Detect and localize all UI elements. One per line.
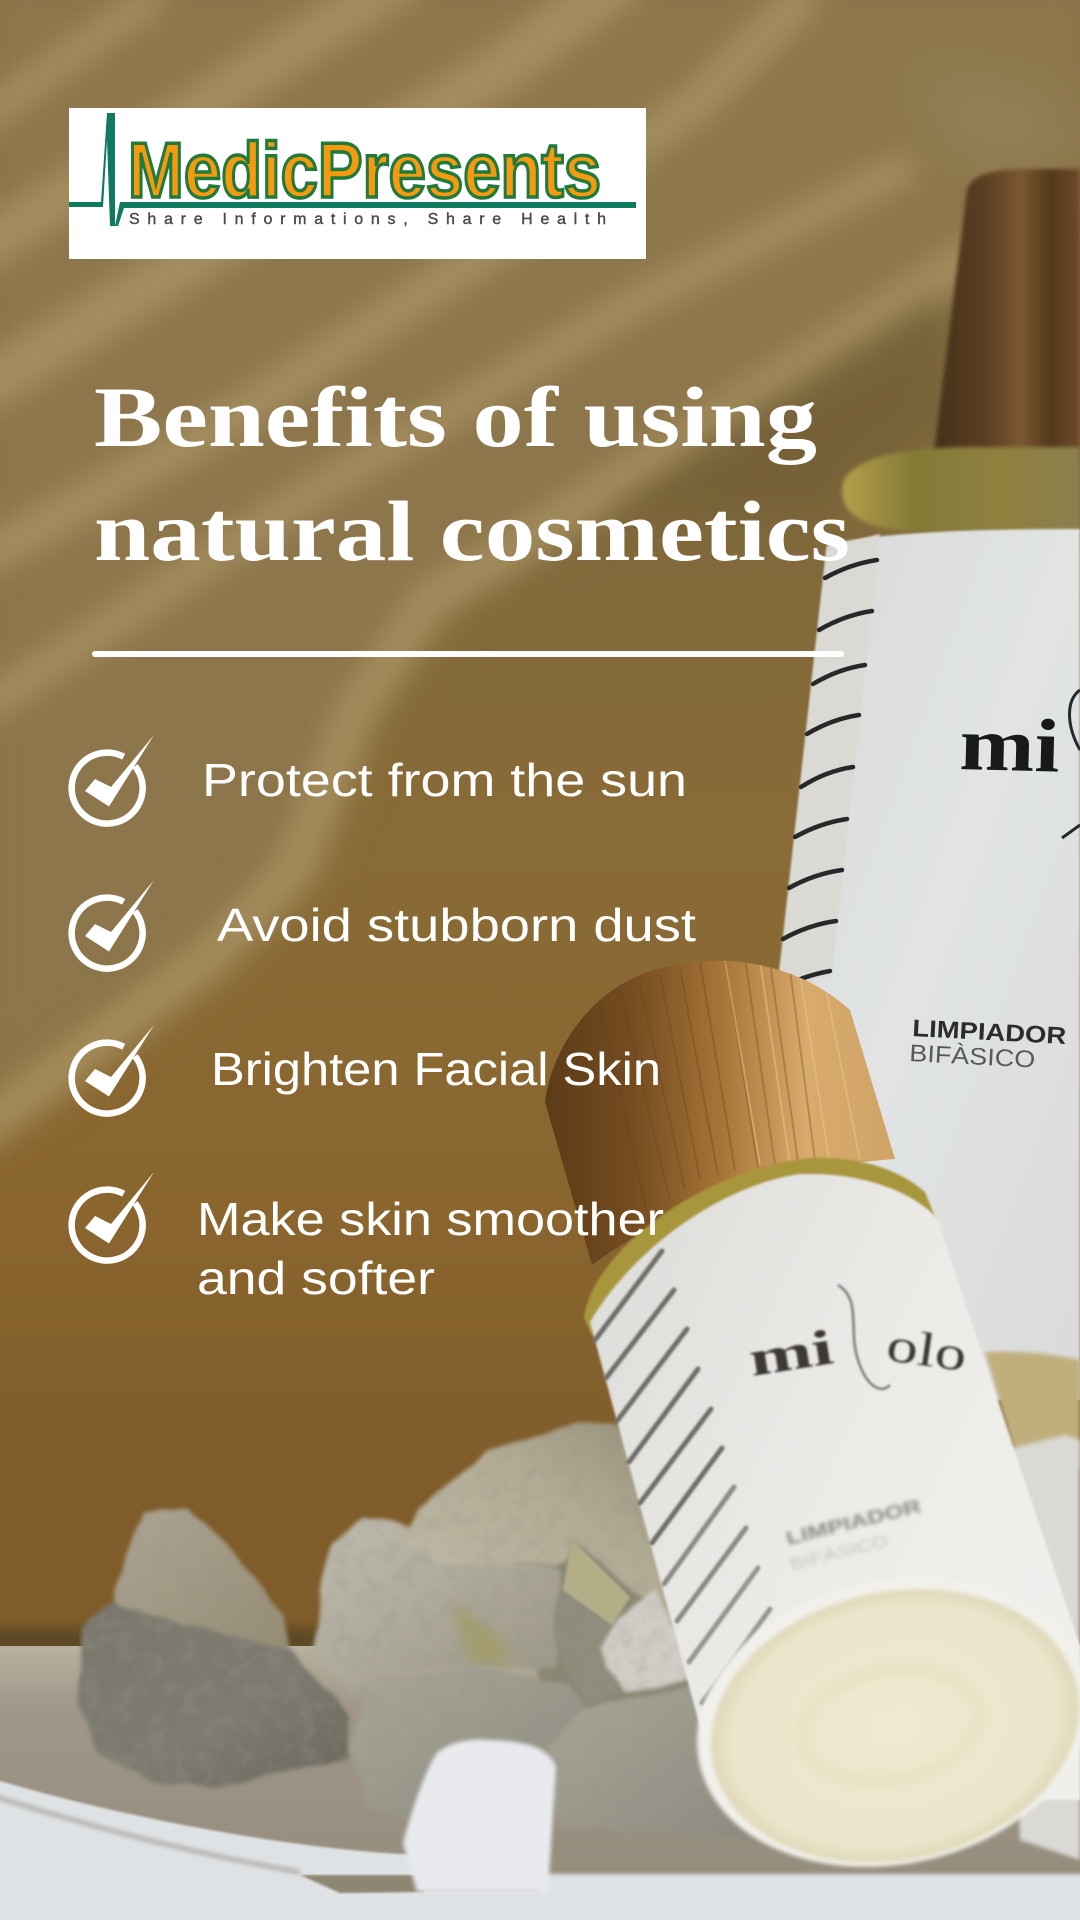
back bottle product type: BIFÀSICO [909, 1040, 1036, 1074]
white paper foreground [0, 1778, 1080, 1920]
benefit text 4 line 2: and softer [197, 1252, 435, 1304]
rock: upper pale [402, 1423, 690, 1640]
back bottle product name: LIMPIADOR [912, 1015, 1067, 1050]
back bottle stripes [777, 560, 877, 990]
benefit 3 [72, 1025, 661, 1114]
check icon 1 [72, 735, 154, 824]
benefit 1 [72, 735, 687, 824]
front bottle stripes [595, 1251, 770, 1703]
rock: olive top facet [563, 1540, 630, 1625]
rocks [78, 1423, 756, 1840]
title [94, 369, 850, 579]
benefit text 4 line 1: Make skin smoother [197, 1193, 664, 1245]
rock: right grey [548, 1683, 756, 1840]
back bottle brand text: mi [959, 702, 1061, 789]
check icon 3 [72, 1025, 154, 1114]
benefit text 4 [197, 1193, 664, 1304]
back bottle glass collar [842, 447, 1080, 533]
back bottle label [760, 529, 1080, 1400]
front bottle cream base [685, 1556, 1080, 1896]
glass dish [985, 1352, 1080, 1470]
benefit text 2: Avoid stubborn dust [217, 899, 696, 951]
front bottle wooden cap [545, 960, 895, 1265]
logo tagline: Share Informations, Share Health [129, 211, 606, 228]
brand syllable mi: mi [745, 1318, 837, 1387]
front bottle brand text [745, 1318, 970, 1387]
benefit text 1: Protect from the sun [202, 754, 687, 806]
rock: white chip [601, 1590, 700, 1693]
back bottle wooden cap [933, 169, 1080, 460]
front bottle [540, 950, 1080, 1902]
table surface [0, 1646, 1080, 1890]
front bottle product type, out of focus: BIFÀSICO [788, 1531, 890, 1574]
check icon 2 [72, 880, 154, 969]
white rock foreground [403, 1740, 556, 1892]
rock: front grey [351, 1667, 587, 1820]
front bottle product name, out of focus: LIMPIADOR [784, 1496, 923, 1549]
title line 2: natural cosmetics [94, 483, 850, 579]
logo wordmark: MedicPresents [128, 126, 601, 214]
rock: large grey [78, 1603, 349, 1787]
logo panel [69, 108, 646, 259]
front bottle base rim [670, 1542, 1080, 1902]
front bottle glass collar [584, 1158, 937, 1336]
check icon 4 [72, 1172, 154, 1261]
rock: white middle [315, 1517, 562, 1700]
benefit 2 [72, 880, 696, 969]
brand syllable olo: olo [883, 1318, 970, 1382]
benefit list [72, 735, 696, 1304]
back bottle [760, 169, 1080, 1400]
title line 1: Benefits of using [94, 369, 817, 465]
rock: highlight [450, 1600, 510, 1665]
benefit text 3: Brighten Facial Skin [211, 1043, 661, 1095]
back bottle stripe band [778, 534, 880, 995]
front bottle label [590, 1174, 1080, 1800]
rock: back translucent [114, 1510, 290, 1660]
back bottle swash [1062, 690, 1080, 838]
divider [92, 651, 844, 657]
rock: shadow filler behind pile [530, 1530, 720, 1720]
logo heartbeat line [69, 113, 636, 226]
rock: small olive [553, 1540, 630, 1707]
benefit 4 [72, 1172, 664, 1304]
white rock behind bottle [1005, 1435, 1080, 1860]
front bottle swash [838, 1285, 890, 1389]
front bottle swirl [792, 1655, 988, 1795]
